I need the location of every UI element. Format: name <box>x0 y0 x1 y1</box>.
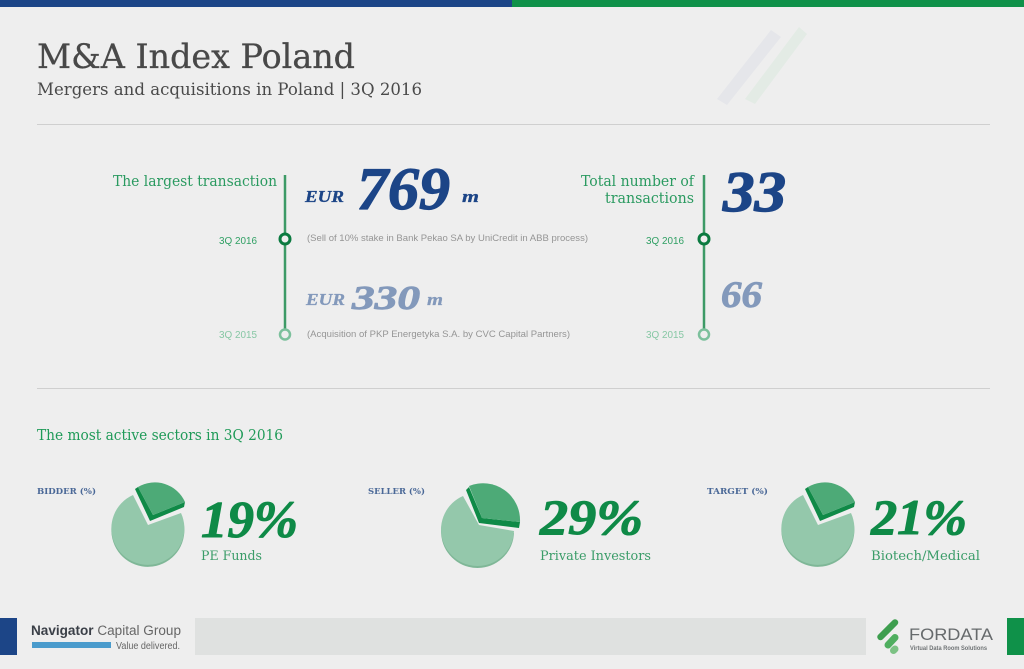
sector: PE Funds: PE Funds <box>201 549 262 564</box>
panel: total number of transactions <box>581 161 786 341</box>
value: EUR 330 m: m <box>427 290 443 309</box>
note: 2016 transaction: (Sell of 10% stake in Bank Pekao SA by UniCredit in ABB process) <box>307 233 588 244</box>
panel: target <box>707 482 980 567</box>
section heading: most active sectors: The most active sectors in 3Q 2016 <box>37 426 283 444</box>
label: bidder: BIDDER (%) <box>37 486 96 497</box>
timeline: number of transactions <box>699 175 709 340</box>
panel: bidder <box>37 482 298 567</box>
pie chart: target 21% <box>781 482 855 567</box>
value: 66: 66 <box>721 275 763 316</box>
value: 21%: 21% <box>870 489 967 545</box>
value: EUR 330 m: EUR <box>305 290 345 309</box>
value: EUR 769 m: m <box>462 187 479 206</box>
value: 19%: 19% <box>201 492 298 549</box>
subtitle: Mergers and acquisitions in Poland | 3Q 2016 <box>37 80 422 100</box>
footer: center grey bar <box>195 618 866 655</box>
top color bar <box>0 0 1024 7</box>
heading: total number of transactions: transactions <box>605 189 694 207</box>
label: 3Q 2016: 3Q 2016 <box>219 236 257 247</box>
value: 29%: 29% <box>539 489 643 545</box>
label: 3Q 2016: 3Q 2016 <box>646 236 684 247</box>
value: EUR 330 m: 330 <box>351 280 420 317</box>
heading: total number of transactions <box>581 172 695 207</box>
value: EUR 769 m: 769 <box>357 156 450 222</box>
logo: Fordata: FORDATA <box>909 625 994 644</box>
label: seller: SELLER (%) <box>368 486 425 497</box>
label: target: TARGET (%) <box>707 486 768 497</box>
decorative diagonal stripes <box>717 27 807 105</box>
label: 3Q 2015: 3Q 2015 <box>219 330 257 341</box>
sector: Biotech/Medical: Biotech/Medical <box>871 549 980 564</box>
panel: seller <box>368 483 651 568</box>
logo: Fordata: Virtual Data Room Solutions <box>910 645 987 652</box>
pie chart: bidder 19% <box>111 482 185 567</box>
logo: Navigator Capital Group <box>31 623 181 652</box>
logo: Fordata <box>880 622 994 652</box>
pie chart: seller 29% <box>441 483 520 568</box>
sector: Private Investors: Private Investors <box>540 549 651 564</box>
label: 3Q 2015: 3Q 2015 <box>646 330 684 341</box>
logo: Navigator Capital Group: Value delivered. <box>116 641 180 652</box>
title: M&A Index Poland <box>37 37 355 77</box>
note: 2015 transaction: (Acquisition of PKP Energetyka S.A. by CVC Capital Partners) <box>307 329 570 340</box>
footer: right green block <box>1007 618 1024 655</box>
icon: Fordata stripes <box>880 622 895 650</box>
value: 33: 33 <box>722 161 786 224</box>
footer: left navy block <box>0 618 17 655</box>
panel: largest transaction <box>113 156 588 341</box>
timeline: largest transaction <box>280 175 290 340</box>
value: EUR 769 m <box>304 156 479 222</box>
value: EUR 769 m: EUR <box>304 187 344 206</box>
value: EUR 330 m <box>305 280 443 317</box>
logo: Navigator Capital Group: Navigator Capital Group <box>31 623 181 638</box>
heading: total number of transactions: Total number of <box>581 172 695 190</box>
heading: the largest transaction: The largest transaction <box>113 172 277 190</box>
